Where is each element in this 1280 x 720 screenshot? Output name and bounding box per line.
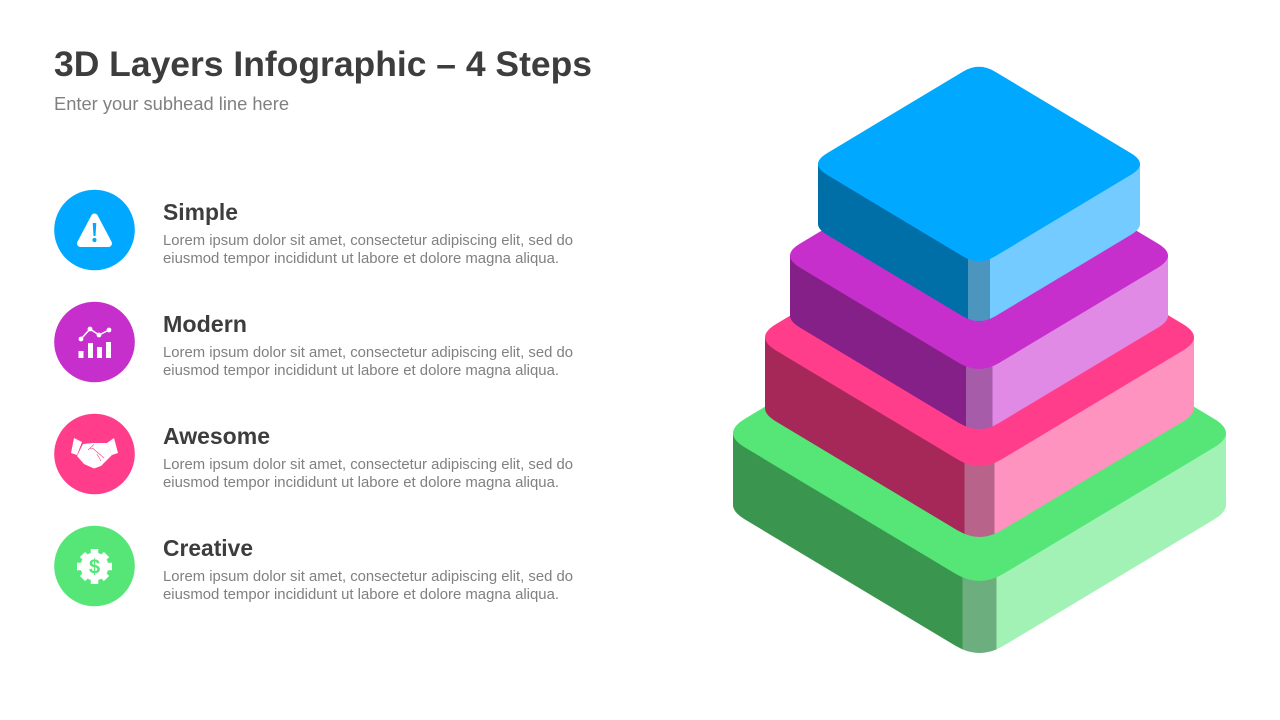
body text: Creative: eiusmod tempor incididunt ut labore et dolore magna aliqua. (163, 587, 559, 603)
title: 3D Layers Infographic – 4 Steps (54, 45, 592, 84)
subhead: Enter your subhead line here (54, 93, 289, 114)
body text: Simple: Lorem ipsum dolor sit amet, consectetur adipiscing elit, sed do (163, 233, 573, 249)
panel: step Awesome (54, 414, 573, 494)
body text: Modern: Lorem ipsum dolor sit amet, consectetur adipiscing elit, sed do (163, 345, 573, 361)
heading: Modern: Modern (163, 311, 247, 337)
icon: handshake (54, 414, 135, 494)
heading: Creative: Creative (163, 535, 253, 561)
body text: Modern: eiusmod tempor incididunt ut labore et dolore magna aliqua. (163, 363, 559, 379)
panel: step Simple (54, 190, 573, 270)
layer: green base (733, 285, 1226, 653)
body text: Simple (163, 233, 573, 267)
panel: step Modern (54, 302, 573, 382)
panel: step Creative (54, 526, 573, 606)
body text: Creative: Lorem ipsum dolor sit amet, consectetur adipiscing elit, sed do (163, 569, 573, 585)
icon: chart with trend line (54, 302, 135, 382)
body text: Creative (163, 569, 573, 603)
body text: Awesome: Lorem ipsum dolor sit amet, consectetur adipiscing elit, sed do (163, 457, 573, 473)
layer: purple (790, 142, 1168, 429)
icon: warning triangle (54, 190, 135, 270)
icon: gear with dollar sign: $ (89, 556, 100, 578)
chart: 3D layer stack (733, 67, 1226, 653)
body text: Awesome: eiusmod tempor incididunt ut labore et dolore magna aliqua. (163, 475, 559, 491)
body text: Awesome (163, 457, 573, 491)
layer: pink (765, 209, 1194, 537)
icon: gear with dollar sign (54, 526, 135, 606)
layer: blue top (818, 67, 1140, 321)
heading: Simple: Simple (163, 199, 238, 225)
body text: Modern (163, 345, 573, 379)
heading: Awesome: Awesome (163, 423, 270, 449)
body text: Simple: eiusmod tempor incididunt ut labore et dolore magna aliqua. (163, 251, 559, 267)
